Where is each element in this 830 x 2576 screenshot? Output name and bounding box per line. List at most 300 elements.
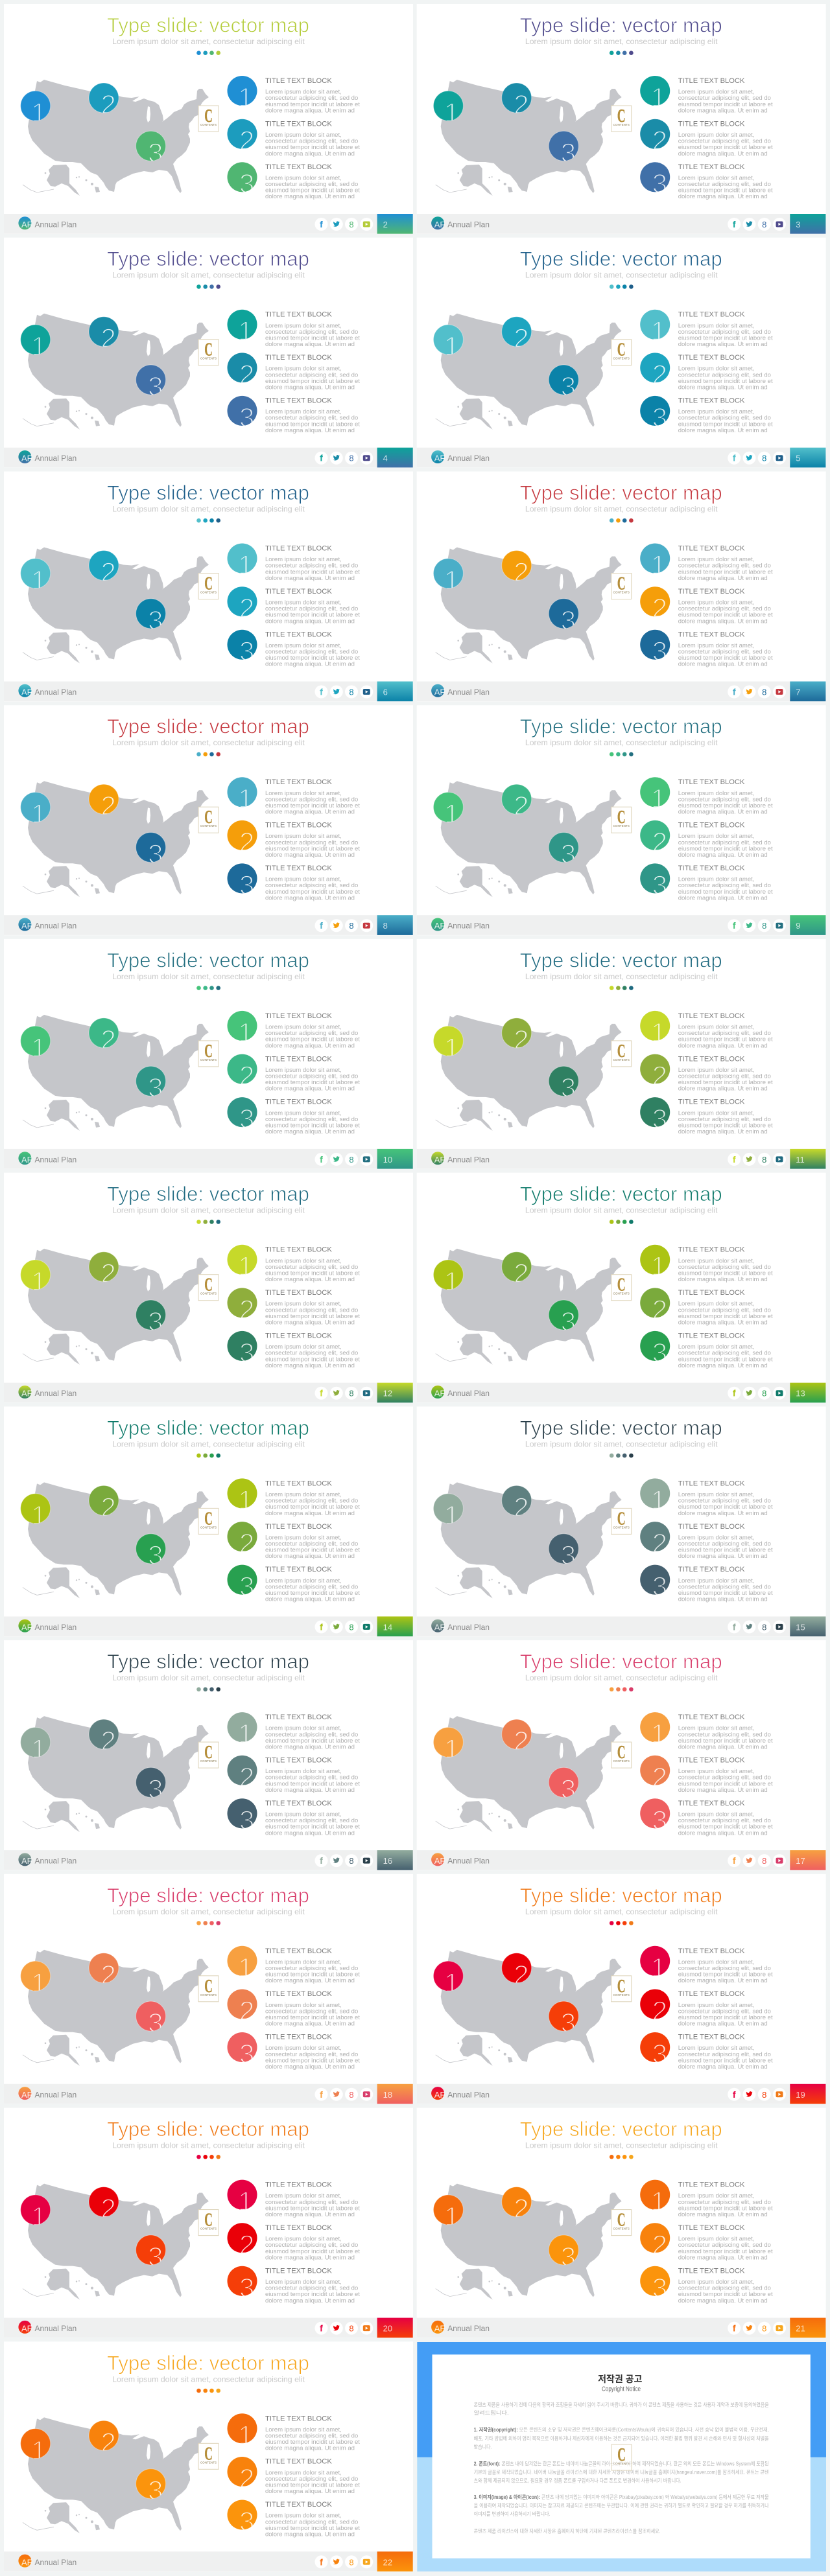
panel: slide 10 (4, 939, 413, 1169)
notice clause 3: 이미지를 변경하여 사용하시기 바랍니다. (474, 2511, 551, 2517)
map pin 2 (502, 1252, 532, 1288)
item 1: eiusmod tempor incidit ut labore et (265, 1270, 360, 1277)
item 3: consectetur adipiscing elit, sed do (265, 2051, 358, 2058)
item 3: dolore magna aliqua. Ut enim ad (265, 2063, 355, 2071)
item 1: eiusmod tempor incidit ut labore et (678, 1503, 773, 1511)
item 2: consectetur adipiscing elit, sed do (265, 2476, 358, 2483)
panel: slide 12 (4, 1173, 413, 1403)
map pin 2 (89, 1953, 119, 1990)
map pin 2 (502, 1719, 532, 1756)
icon: facebook (728, 1153, 741, 1166)
watermark logo: C (617, 2210, 625, 2231)
footer (4, 2318, 413, 2338)
item 1: eiusmod tempor incidit ut labore et (678, 1036, 773, 1043)
item 1: 1 (238, 550, 253, 580)
item 2: Lorem ipsum dolor sit amet, (678, 366, 754, 373)
subtitle: Lorem ipsum dolor sit amet, consectetur adipiscing elit (112, 972, 305, 981)
item 3: TITLE TEXT BLOCK (678, 1332, 745, 1340)
title: Type slide: vector map (520, 715, 722, 738)
icon: google: 8 (349, 687, 354, 697)
map pin 3 (549, 131, 579, 161)
icon: youtube (360, 2322, 373, 2335)
map pin 2: 2 (101, 1959, 116, 1990)
icon: youtube (773, 686, 786, 699)
title: Type slide: vector map (520, 248, 722, 270)
map pin 2: 2 (514, 2193, 529, 2223)
item 2: dolore magna aliqua. Ut enim ad (265, 2488, 355, 2495)
item 3: dolore magna aliqua. Ut enim ad (265, 1362, 355, 1369)
item 3 (227, 1565, 360, 1603)
footer logo (431, 216, 445, 229)
item 3: 3 (652, 636, 667, 666)
map pin 2: 2 (101, 1258, 116, 1288)
item 1: dolore magna aliqua. Ut enim ad (678, 575, 768, 582)
notice clause 1 (474, 2426, 769, 2450)
item 2: dolore magna aliqua. Ut enim ad (265, 2254, 355, 2261)
watermark logo (611, 106, 632, 132)
slide background (4, 2341, 413, 2571)
item 2: TITLE TEXT BLOCK (678, 1055, 745, 1063)
item 1: consectetur adipiscing elit, sed do (678, 1264, 771, 1271)
map pin 1: 1 (31, 331, 47, 362)
icon: facebook (728, 1620, 741, 1633)
item 3: Lorem ipsum dolor sit amet, (265, 1109, 342, 1117)
icon: youtube (773, 1387, 786, 1400)
item 3 (227, 2266, 360, 2304)
footer (4, 915, 413, 935)
map pin 2 (89, 2187, 119, 2223)
footer logo (18, 2321, 32, 2334)
item 3: TITLE TEXT BLOCK (265, 2501, 332, 2509)
footer label: Annual Plan (447, 1857, 490, 1866)
subtitle: Lorem ipsum dolor sit amet, consectetur adipiscing elit (525, 37, 718, 46)
notice clause 2: 기본의 글꼴로 제작되었습니다. 네이버 나눔글꼴 라이선스에 대한 자세한 사항은 네이버 나눔글꼴 홈페이지(hangeul.naver.com)를 참조하세요. 폰트는 콘텐 (474, 2469, 769, 2476)
item 1 (227, 777, 360, 816)
subtitle: Lorem ipsum dolor sit amet, consectetur adipiscing elit (112, 1439, 305, 1448)
item 1: Lorem ipsum dolor sit amet, (678, 1725, 754, 1732)
dots (196, 1921, 220, 1925)
watermark logo: C (617, 1041, 625, 1062)
map pin 2 (88, 316, 119, 347)
item 1 (640, 543, 773, 582)
icon: twitter (330, 2322, 343, 2335)
item 2: dolore magna aliqua. Ut enim ad (265, 1085, 355, 1093)
item 2: 2 (652, 1060, 667, 1091)
item 3: dolore magna aliqua. Ut enim ad (265, 1596, 355, 1603)
watermark logo: C (204, 1275, 213, 1295)
icon: facebook: f (733, 687, 736, 697)
icon: facebook (315, 218, 328, 231)
item 3 (640, 1331, 773, 1369)
item 1: dolore magna aliqua. Ut enim ad (265, 1510, 355, 1517)
item 1: TITLE TEXT BLOCK (678, 311, 745, 319)
subtitle: Lorem ipsum dolor sit amet, consectetur adipiscing elit (525, 271, 718, 280)
footer logo: AF (434, 220, 445, 229)
item 2: dolore magna aliqua. Ut enim ad (678, 2254, 768, 2261)
footer label: Annual Plan (35, 2090, 77, 2099)
item 3: Lorem ipsum dolor sit amet, (678, 2045, 754, 2052)
item 2 (227, 1990, 360, 2028)
item 1: eiusmod tempor incidit ut labore et (678, 335, 773, 342)
map pin 2 (89, 2420, 119, 2457)
icon: facebook (315, 1854, 328, 1867)
item 1 (227, 76, 360, 114)
item 1: 1 (238, 1952, 253, 1982)
map pin 1: 1 (31, 2201, 47, 2232)
item 1: dolore magna aliqua. Ut enim ad (678, 809, 768, 816)
footer logo (431, 1152, 445, 1165)
item 3 (640, 1097, 773, 1135)
panel: slide 15 (417, 1406, 826, 1636)
icon: google (758, 1387, 771, 1400)
item 2: consectetur adipiscing elit, sed do (678, 138, 771, 145)
item 2: dolore magna aliqua. Ut enim ad (678, 384, 768, 391)
item 1: consectetur adipiscing elit, sed do (265, 1731, 358, 1738)
footer logo: AF (21, 2557, 32, 2567)
item 1: eiusmod tempor incidit ut labore et (678, 101, 773, 108)
item 2 (640, 1990, 773, 2028)
map pin 2 (89, 1485, 119, 1522)
item 1: 1 (651, 1251, 666, 1281)
item 2: eiusmod tempor incidit ut labore et (265, 1313, 360, 1320)
item 3: eiusmod tempor incidit ut labore et (678, 187, 773, 194)
watermark logo: CONTENTS (200, 357, 217, 360)
notice intro: 콘텐츠 제품을 사용하기 전에 다음의 항목과 조항들을 자세히 읽어 주시기 바랍니다. 귀하가 이 콘텐츠 제품을 사용하는 것은 사용자 계약과 보증에 동의하였음을 (474, 2402, 769, 2408)
US map (23, 2184, 209, 2300)
item 3: 3 (239, 870, 254, 900)
item 1: eiusmod tempor incidit ut labore et (265, 802, 360, 809)
map pin 3: 3 (561, 371, 576, 402)
item 3: eiusmod tempor incidit ut labore et (265, 2057, 360, 2064)
dots (196, 2389, 220, 2393)
item 2: Lorem ipsum dolor sit amet, (265, 366, 342, 373)
item 2: dolore magna aliqua. Ut enim ad (265, 384, 355, 391)
icon: google (345, 1854, 358, 1867)
map pin 1: 1 (444, 97, 459, 128)
icon: facebook (315, 1153, 328, 1166)
dots (196, 1454, 220, 1457)
slide background (4, 1406, 413, 1636)
subtitle: Lorem ipsum dolor sit amet, consectetur adipiscing elit (112, 37, 305, 46)
item 2: dolore magna aliqua. Ut enim ad (265, 1553, 355, 1560)
title: Type slide: vector map (520, 2118, 722, 2141)
icon: facebook (728, 2088, 741, 2101)
notice heading: 저작권 공고 (598, 2374, 643, 2384)
footer logo: AF (21, 454, 32, 463)
icon: facebook (315, 452, 328, 465)
icon: google (345, 2322, 358, 2335)
footer logo (18, 1386, 32, 1398)
item 1: Lorem ipsum dolor sit amet, (265, 1257, 342, 1264)
footer (417, 2084, 826, 2104)
page number: 20 (383, 2324, 392, 2334)
item 1: dolore magna aliqua. Ut enim ad (678, 1977, 768, 1984)
item 3: eiusmod tempor incidit ut labore et (678, 1590, 773, 1597)
page number: 10 (383, 1155, 392, 1165)
item 1: eiusmod tempor incidit ut labore et (265, 335, 360, 342)
icon: google: 8 (762, 1155, 766, 1165)
item 3: dolore magna aliqua. Ut enim ad (265, 894, 355, 901)
map pin 3: 3 (148, 2475, 163, 2505)
item 3: eiusmod tempor incidit ut labore et (678, 2291, 773, 2298)
item 3: eiusmod tempor incidit ut labore et (265, 1590, 360, 1597)
footer (417, 1149, 826, 1169)
item 1: consectetur adipiscing elit, sed do (678, 1965, 771, 1972)
item 2: eiusmod tempor incidit ut labore et (265, 2482, 360, 2489)
slide background (417, 1406, 826, 1636)
item 3: TITLE TEXT BLOCK (265, 1332, 332, 1340)
title: Type slide: vector map (107, 2118, 309, 2141)
map pin 3: 3 (148, 2241, 163, 2271)
watermark logo: CONTENTS (613, 824, 630, 828)
item 2: Lorem ipsum dolor sit amet, (678, 1301, 754, 1308)
item 3: consectetur adipiscing elit, sed do (265, 648, 358, 656)
item 1 (640, 1712, 773, 1751)
panel: slide 11 (417, 939, 826, 1169)
item 2 (227, 586, 360, 625)
item 1: dolore magna aliqua. Ut enim ad (265, 2445, 355, 2452)
footer (4, 1616, 413, 1636)
item 2: 2 (239, 2229, 254, 2260)
icon: google: 8 (349, 454, 354, 463)
item 1: Lorem ipsum dolor sit amet, (678, 1491, 754, 1498)
watermark logo: C (204, 1977, 213, 1997)
US map (23, 314, 209, 430)
icon: facebook: f (320, 1388, 323, 1398)
icon: youtube (360, 686, 373, 699)
footer (417, 1850, 826, 1870)
footer logo: AF (434, 1856, 445, 1866)
icon: google: 8 (349, 2557, 354, 2567)
page number (790, 1383, 825, 1402)
item 2: Lorem ipsum dolor sit amet, (265, 2002, 342, 2009)
item 1: dolore magna aliqua. Ut enim ad (678, 1276, 768, 1283)
map pin 1 (433, 2195, 463, 2232)
subtitle: Lorem ipsum dolor sit amet, consectetur adipiscing elit (112, 504, 305, 513)
icon: facebook (315, 686, 328, 699)
map pin 3: 3 (561, 137, 576, 168)
watermark logo (611, 807, 632, 833)
item 1: Lorem ipsum dolor sit amet, (265, 2426, 342, 2433)
page number (377, 1149, 413, 1169)
watermark logo (611, 1742, 632, 1768)
item 1: TITLE TEXT BLOCK (678, 1947, 745, 1955)
item 2: consectetur adipiscing elit, sed do (265, 138, 358, 145)
map pin 2: 2 (101, 1492, 116, 1522)
icon: twitter (743, 1387, 756, 1400)
icon: facebook: f (320, 687, 323, 697)
item 2: TITLE TEXT BLOCK (678, 1990, 745, 1998)
footer label: Annual Plan (35, 2324, 77, 2333)
icon: twitter (330, 1620, 343, 1633)
map pin 2: 2 (514, 1726, 529, 1756)
item 2: eiusmod tempor incidit ut labore et (678, 612, 773, 619)
watermark logo (198, 1742, 219, 1768)
icon: facebook (315, 1620, 328, 1633)
watermark logo: CONTENTS (613, 1292, 630, 1295)
item 2: 2 (652, 1761, 667, 1792)
map pin 3 (136, 1066, 166, 1103)
watermark logo: C (617, 1977, 625, 1997)
item 2: Lorem ipsum dolor sit amet, (265, 1534, 342, 1541)
item 1: consectetur adipiscing elit, sed do (678, 1498, 771, 1505)
subtitle: Lorem ipsum dolor sit amet, consectetur adipiscing elit (112, 1206, 305, 1215)
item 2: consectetur adipiscing elit, sed do (265, 1540, 358, 1548)
footer (417, 1383, 826, 1402)
item 2: dolore magna aliqua. Ut enim ad (678, 1319, 768, 1326)
subtitle: Lorem ipsum dolor sit amet, consectetur adipiscing elit (112, 2141, 305, 2150)
subtitle: Lorem ipsum dolor sit amet, consectetur adipiscing elit (525, 738, 718, 747)
item 3: TITLE TEXT BLOCK (265, 1800, 332, 1807)
item 1: consectetur adipiscing elit, sed do (265, 1498, 358, 1505)
watermark logo: CONTENTS (200, 123, 217, 126)
map pin 1 (433, 1494, 463, 1530)
page number: 17 (796, 1856, 805, 1866)
item 3: TITLE TEXT BLOCK (678, 1800, 745, 1807)
watermark logo: CONTENTS (200, 2227, 217, 2231)
icon: twitter (330, 919, 343, 932)
item 2: 2 (239, 125, 254, 156)
watermark logo: CONTENTS (200, 591, 217, 594)
item 2: consectetur adipiscing elit, sed do (678, 1774, 771, 1781)
icon: google: 8 (349, 1856, 354, 1866)
icon: google (758, 1620, 771, 1633)
footer (4, 448, 413, 467)
icon: facebook: f (733, 453, 736, 463)
notice intro (474, 2402, 769, 2416)
panel: copyright notice (417, 2342, 826, 2571)
item 1: TITLE TEXT BLOCK (678, 77, 745, 85)
item 3 (227, 2500, 360, 2538)
item 2: dolore magna aliqua. Ut enim ad (678, 618, 768, 625)
footer logo (431, 1386, 445, 1398)
watermark logo: CONTENTS (200, 2461, 217, 2464)
item 2: TITLE TEXT BLOCK (678, 120, 745, 128)
item 2: consectetur adipiscing elit, sed do (678, 371, 771, 378)
item 1: eiusmod tempor incidit ut labore et (678, 568, 773, 575)
item 1: TITLE TEXT BLOCK (265, 2415, 332, 2422)
footer label: Annual Plan (35, 1389, 77, 1398)
item 3: TITLE TEXT BLOCK (265, 397, 332, 404)
item 3: 3 (239, 2039, 254, 2069)
icon: twitter (330, 452, 343, 465)
footer label: Annual Plan (447, 220, 490, 229)
icon: twitter (743, 2322, 756, 2335)
map pin 3 (549, 364, 579, 395)
icon: youtube (360, 1153, 373, 1166)
US map (436, 1015, 622, 1131)
icon: twitter (743, 919, 756, 932)
page number (377, 682, 413, 701)
item 3: eiusmod tempor incidit ut labore et (265, 2291, 360, 2298)
map pin 3: 3 (148, 1540, 163, 1570)
icon: twitter (330, 1854, 343, 1867)
map pin 3 (136, 364, 166, 395)
US map (436, 314, 622, 430)
footer logo (18, 1619, 32, 1632)
map pin 3 (136, 2235, 166, 2271)
item 1: 1 (651, 783, 666, 814)
page number: 14 (383, 1622, 392, 1632)
page number: 4 (383, 454, 388, 463)
item 2: TITLE TEXT BLOCK (678, 354, 745, 362)
watermark logo (198, 1041, 219, 1067)
map pin 2: 2 (514, 1492, 529, 1522)
map pin 3 (136, 1300, 166, 1336)
item 2 (640, 1054, 773, 1093)
item 1 (640, 1011, 773, 1049)
item 1: Lorem ipsum dolor sit amet, (265, 790, 342, 797)
item 3: TITLE TEXT BLOCK (265, 163, 332, 171)
item 2: Lorem ipsum dolor sit amet, (265, 1301, 342, 1308)
map pin 3: 3 (561, 1073, 576, 1103)
page number: 6 (383, 687, 388, 697)
watermark logo: CONTENTS (613, 591, 630, 594)
item 2: TITLE TEXT BLOCK (678, 1289, 745, 1297)
map pin 1 (433, 1961, 463, 1998)
item 1: Lorem ipsum dolor sit amet, (678, 790, 754, 797)
US map (23, 1482, 209, 1598)
item 1: consectetur adipiscing elit, sed do (678, 2199, 771, 2206)
item 3: 3 (239, 168, 254, 199)
icon: twitter (330, 1153, 343, 1166)
notice clause 2 (474, 2460, 769, 2483)
item 3: dolore magna aliqua. Ut enim ad (265, 1829, 355, 1837)
map pin 2: 2 (101, 1726, 116, 1756)
item 1 (640, 1245, 773, 1283)
icon: google: 8 (762, 1622, 766, 1632)
item 3: consectetur adipiscing elit, sed do (265, 2518, 358, 2525)
item 2: dolore magna aliqua. Ut enim ad (678, 150, 768, 157)
item 1: Lorem ipsum dolor sit amet, (678, 1958, 754, 1966)
page number (377, 214, 413, 234)
footer logo: AF (21, 2090, 32, 2100)
item 1: 1 (238, 783, 253, 814)
panel: slide 13 (417, 1173, 826, 1403)
icon: google (345, 2555, 358, 2568)
footer label: Annual Plan (447, 1389, 490, 1398)
panel: slide 22 (4, 2341, 413, 2571)
watermark logo: CONTENTS (200, 1526, 217, 1529)
map pin 2: 2 (514, 1024, 529, 1054)
footer logo: AF (21, 921, 32, 931)
notice clause 2: 2. 폰트(font): 콘텐츠 내에 담겨있는 한글 폰트는 네이버 나눔글꼴의 라이선스를 이용하여 제작되었습니다. 한글 외의 모든 폰트는 Windows System에 포함된 (474, 2460, 769, 2466)
watermark logo (611, 2444, 632, 2470)
icon: youtube (360, 2555, 373, 2568)
icon: twitter (743, 218, 756, 231)
item 2: 2 (652, 2229, 667, 2260)
footer (417, 214, 826, 234)
page number (790, 2318, 825, 2338)
map pin 2 (501, 83, 532, 113)
item 2: eiusmod tempor incidit ut labore et (265, 144, 360, 151)
icon: youtube (360, 919, 373, 932)
item 3: dolore magna aliqua. Ut enim ad (265, 193, 355, 200)
item 3: 3 (239, 1805, 254, 1835)
item 1: dolore magna aliqua. Ut enim ad (265, 1977, 355, 1984)
map pin 3 (549, 599, 578, 635)
subtitle: Lorem ipsum dolor sit amet, consectetur adipiscing elit (525, 1439, 718, 1448)
title: Type slide: vector map (107, 715, 309, 738)
title: Type slide: vector map (107, 2352, 309, 2374)
title: Type slide: vector map (107, 248, 309, 270)
icon: youtube (773, 2322, 786, 2335)
item 1 (227, 1946, 360, 1984)
map pin 3: 3 (561, 1540, 576, 1570)
page number (790, 448, 825, 467)
item 3: Lorem ipsum dolor sit amet, (265, 1811, 342, 1818)
panel: slide 8 (4, 705, 413, 935)
